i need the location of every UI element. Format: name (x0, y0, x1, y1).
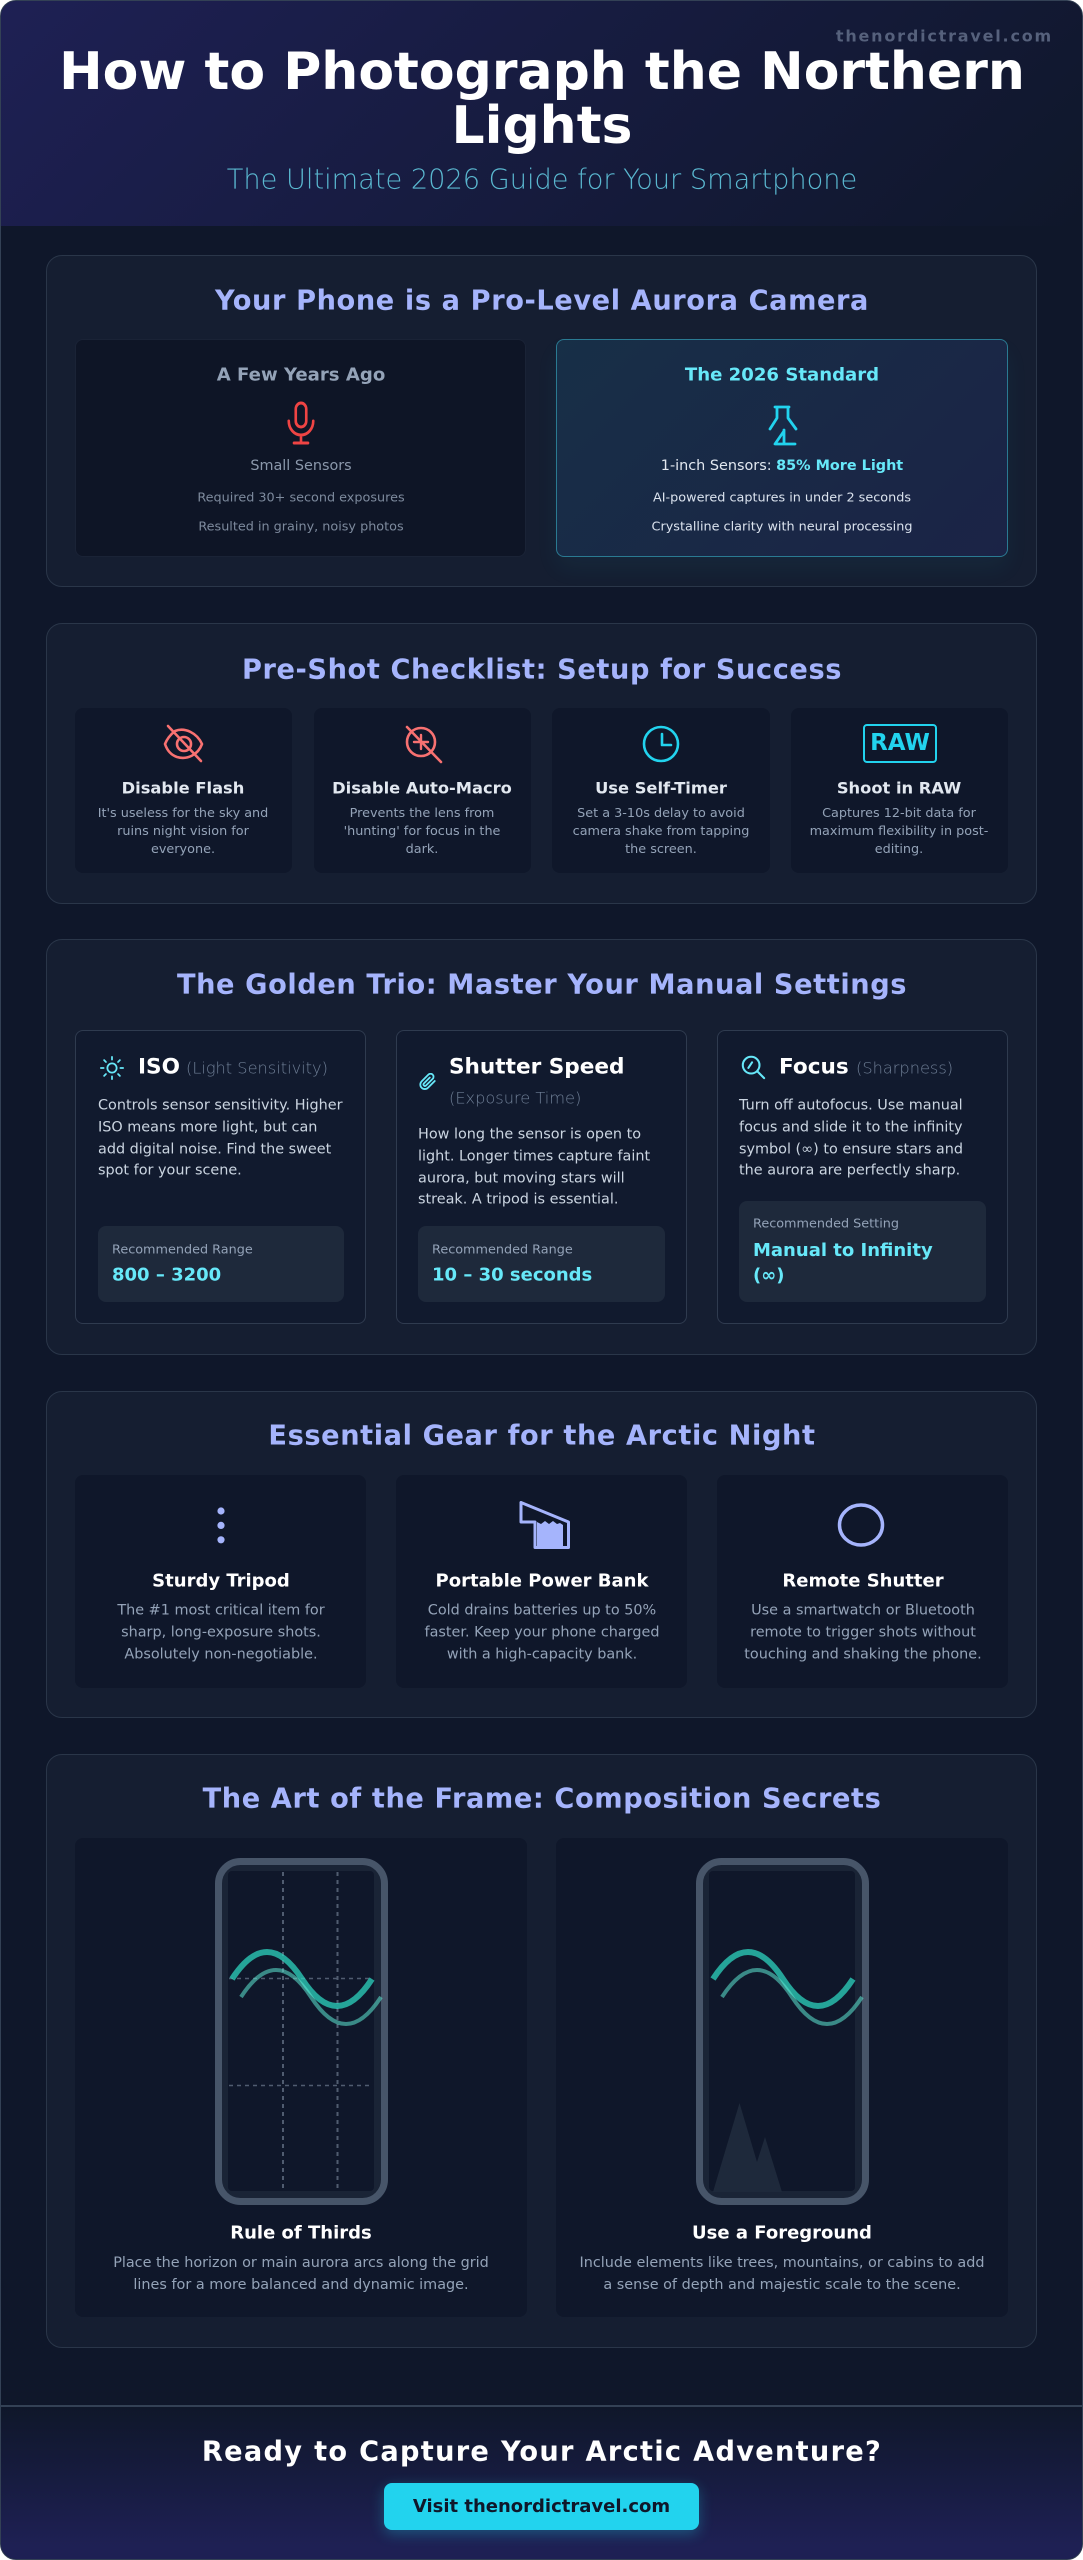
item description: editing. (875, 842, 923, 857)
range value: 10 – 30 seconds (432, 1264, 592, 1286)
old noise text: Resulted in grainy, noisy photos (198, 520, 404, 534)
title: Lights (451, 96, 633, 156)
card description: lines for a more balanced and dynamic image. (133, 2277, 469, 2293)
setting value (753, 1240, 933, 1286)
checklist card: self-timer (552, 708, 770, 873)
setting description: Turn off autofocus. Use manual (739, 1097, 963, 1113)
new clarity text: Crystalline clarity with neural processing (652, 520, 912, 534)
item description: Captures 12-bit data for (822, 806, 976, 821)
item title: Disable Auto-Macro (332, 778, 512, 798)
heading: pro-level aurora camera: Your Phone is a Pro-Level Aurora Camera (215, 285, 869, 316)
icon: raw badge (863, 724, 937, 763)
item description: 'hunting' for focus in the (344, 824, 500, 839)
setting description: the aurora are perfectly sharp. (739, 1163, 960, 1179)
range label: Recommended Range (112, 1242, 253, 1258)
setting description: aurora, but moving stars will (418, 1170, 625, 1186)
panel: pro-level aurora camera (46, 254, 1037, 587)
checklist card: disable auto-macro (314, 708, 531, 873)
new capture text: AI-powered captures in under 2 seconds (653, 490, 911, 506)
heading: essential gear: Essential Gear for the Arctic Night (268, 1420, 816, 1451)
panel: essential gear (46, 1391, 1037, 1718)
settings card: shutter speed (396, 1030, 687, 1324)
gear description: touching and shaking the phone. (744, 1646, 982, 1662)
card: the 2026 standard (556, 339, 1008, 557)
new sensor text: 1-inch Sensors: 85% More Light (661, 458, 903, 474)
setting description: How long the sensor is open to (418, 1126, 641, 1142)
gear description: The #1 most critical item for (117, 1602, 325, 1618)
item description: maximum flexibility in post- (810, 824, 988, 839)
item description: ruins night vision for (117, 824, 249, 839)
footer heading: Ready to Capture Your Arctic Adventure? (202, 2436, 882, 2468)
gear description: faster. Keep your phone charged (425, 1624, 659, 1640)
item description: the screen. (625, 842, 697, 857)
card description (113, 2255, 489, 2293)
gear title: Sturdy Tripod (152, 1570, 290, 1592)
gear card: power bank (396, 1475, 687, 1688)
button: visit site (384, 2483, 699, 2530)
panel: golden trio (46, 939, 1037, 1355)
item description: It's useless for the sky and (98, 806, 268, 821)
item description (573, 806, 749, 857)
setting description: streak. A tripod is essential. (418, 1192, 618, 1208)
gear title: Portable Power Bank (436, 1570, 648, 1592)
icon: power bank (520, 1501, 570, 1549)
icon: flask (768, 406, 798, 446)
item description (344, 806, 500, 857)
icon: macro off (406, 726, 442, 764)
item title: Use Self-Timer (595, 778, 727, 798)
icon: raw badge: RAW (870, 730, 930, 756)
gear description (424, 1602, 659, 1662)
icon: clock (642, 726, 680, 762)
range value: 800 – 3200 (112, 1264, 221, 1286)
panel: composition (46, 1754, 1037, 2348)
recommended range (418, 1226, 665, 1302)
setting value: (∞) (753, 1265, 784, 1286)
setting description: symbol (∞) to ensure stars and (739, 1141, 963, 1157)
settings card: focus (717, 1030, 1008, 1324)
gear card: remote shutter (717, 1475, 1008, 1688)
illustration: phone with thirds grid (215, 1858, 388, 2205)
card description: Place the horizon or main aurora arcs along the grid (113, 2255, 489, 2271)
card title: Use a Foreground (692, 2222, 872, 2244)
recommended setting (739, 1201, 986, 1302)
icon: sun (100, 1056, 124, 1080)
setting subtitle: (Light Sensitivity) (186, 1058, 328, 1078)
item description: Set a 3-10s delay to avoid (577, 806, 745, 821)
title (59, 42, 1025, 156)
watermark site name: thenordictravel.com (836, 26, 1053, 46)
icon: magnifier (742, 1056, 766, 1080)
item description: dark. (406, 842, 438, 857)
setting subtitle: (Exposure Time) (449, 1088, 581, 1108)
item description: camera shake from tapping (573, 824, 749, 839)
item title: Disable Flash (122, 778, 244, 798)
setting label: Recommended Setting (753, 1216, 899, 1232)
icon: paperclip (419, 1073, 436, 1090)
setting description: add digital noise. Find the sweet (98, 1141, 331, 1157)
setting description (418, 1126, 650, 1208)
gear description: Use a smartwatch or Bluetooth (751, 1602, 975, 1618)
gear description: Absolutely non-negotiable. (124, 1646, 318, 1662)
panel: pre-shot checklist (46, 623, 1037, 904)
item description: everyone. (151, 842, 215, 857)
subtitle: The Ultimate 2026 Guide for Your Smartphone (227, 164, 857, 196)
card title: A Few Years Ago (217, 364, 385, 386)
setting subtitle: (Sharpness) (856, 1058, 953, 1078)
setting name: Focus (779, 1054, 849, 1080)
header banner (1, 1, 1082, 226)
checklist card: disable flash (75, 708, 292, 873)
old exposure text: Required 30+ second exposures (197, 490, 405, 506)
footer call to action (1, 2405, 1082, 2559)
gear description: with a high-capacity bank. (447, 1646, 637, 1662)
icon: dots (217, 1507, 225, 1544)
card description (580, 2255, 984, 2293)
gear card: tripod (75, 1475, 366, 1688)
gear description (744, 1602, 982, 1662)
setting description: focus and slide it to the infinity (739, 1119, 963, 1135)
setting description: Controls sensor sensitivity. Higher (98, 1097, 343, 1113)
setting name: ISO (138, 1054, 180, 1080)
gear description: Cold drains batteries up to 50% (428, 1602, 656, 1618)
card description: Include elements like trees, mountains, or cabins to add (580, 2255, 984, 2271)
settings card: iso (75, 1030, 366, 1324)
item description: Prevents the lens from (350, 806, 494, 821)
setting value: Manual to Infinity (753, 1240, 933, 1261)
illustration: phone with mountains (696, 1858, 869, 2205)
icon: microphone (287, 402, 315, 444)
setting description: spot for your scene. (98, 1163, 242, 1179)
item description (98, 806, 268, 857)
card: a few years ago (75, 339, 526, 557)
gear title: Remote Shutter (782, 1570, 944, 1592)
setting description (738, 1097, 963, 1179)
item title: Shoot in RAW (837, 778, 961, 798)
checklist card: shoot in raw (791, 708, 1008, 873)
item description (810, 806, 988, 857)
card title: Rule of Thirds (230, 2222, 372, 2244)
heading: pre-shot checklist: Pre-Shot Checklist: Setup for Success (242, 654, 842, 685)
recommended range (98, 1226, 344, 1302)
composition card: rule of thirds (75, 1838, 527, 2317)
icon: eye off (164, 724, 204, 762)
heading: composition: The Art of the Frame: Composition Secrets (203, 1783, 881, 1814)
setting description (98, 1097, 343, 1179)
setting description: light. Longer times capture faint (418, 1148, 650, 1164)
button: visit site: Visit thenordictravel.com (413, 2496, 670, 2517)
range label: Recommended Range (432, 1242, 573, 1258)
icon: ring (838, 1503, 884, 1547)
setting name: Shutter Speed (449, 1054, 625, 1080)
setting description: ISO means more light, but can (98, 1119, 317, 1135)
composition card: use a foreground (556, 1838, 1008, 2317)
heading: golden trio: The Golden Trio: Master Your Manual Settings (177, 969, 907, 1000)
old sensor text: Small Sensors (250, 458, 352, 474)
gear description: sharp, long-exposure shots. (121, 1624, 321, 1640)
card description: a sense of depth and majestic scale to the scene. (603, 2277, 961, 2293)
card title: The 2026 Standard (685, 364, 879, 386)
gear description (117, 1602, 325, 1662)
gear description: remote to trigger shots without (750, 1624, 976, 1640)
title: How to Photograph the Northern (59, 42, 1025, 102)
